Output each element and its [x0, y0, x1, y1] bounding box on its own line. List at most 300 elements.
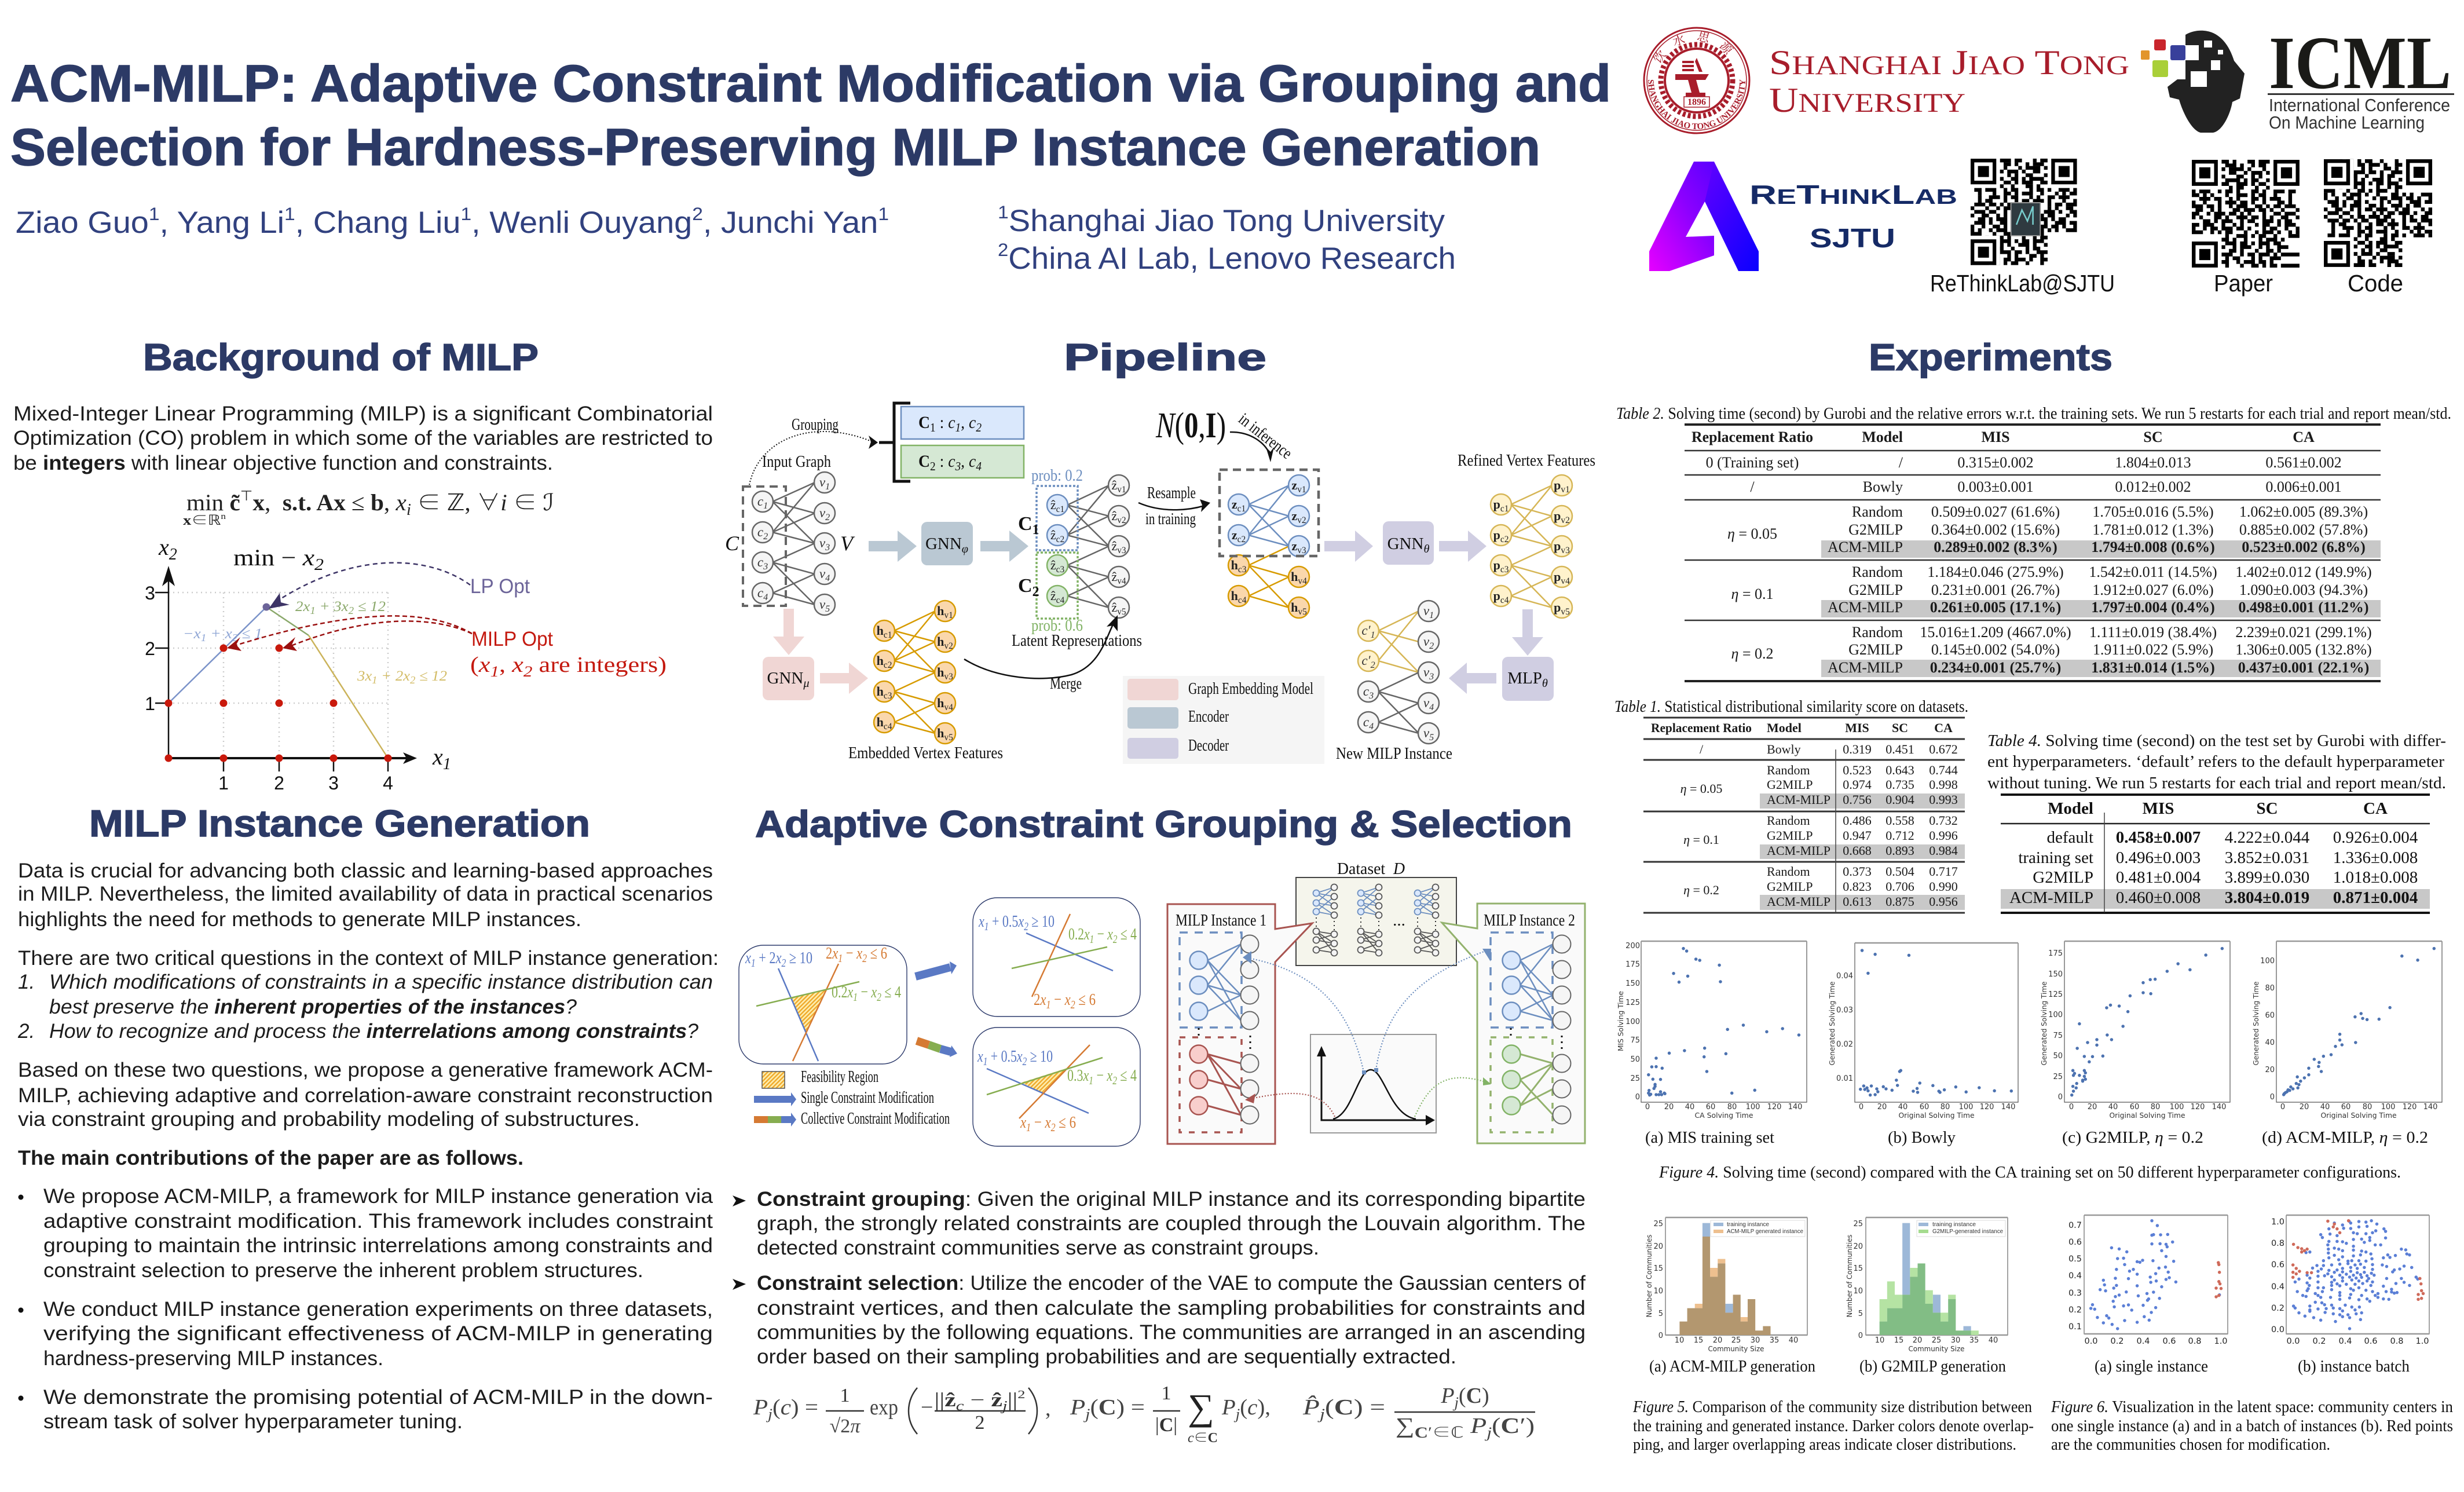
text block: main contributions: stream task of solver hyperparameter tuning.	[43, 1410, 463, 1433]
table 4: 3.852±0.031	[2225, 849, 2309, 867]
text block: main contributions: We propose ACM-MILP, a framework for MILP instance generation via	[43, 1185, 713, 1208]
text block: main contributions: hardness-preserving MILP instances.	[43, 1347, 383, 1370]
QR code: code	[2324, 159, 2432, 267]
equation: MILP formulation: min c̃⊤x, s.t. Ax ≤ b, xi ∈ ℤ, ∀i ∈ ℐ	[186, 489, 554, 519]
table 1 caption: Table 1. Statistical distributional similarity score on datasets.	[1614, 698, 1968, 716]
table 1: 0.893	[1885, 843, 1914, 858]
heading: MILP Instance Generation: MILP Instance Generation	[89, 802, 590, 844]
histogram legend: training instance	[1932, 1222, 1976, 1228]
table 1: 0.823	[1843, 879, 1872, 894]
embedded vertex features: hv4	[937, 696, 953, 712]
icon: SJTU seal: 饮水思源	[1653, 30, 1734, 63]
chart: ACM-MILP scatter: 140	[2423, 1103, 2437, 1111]
chart: MIS training set scatter: 100	[1625, 1018, 1640, 1026]
table 2: Random	[1852, 624, 1903, 641]
table 1: 0.668	[1843, 843, 1872, 858]
chart: latent space single instance: 0.2	[2068, 1306, 2082, 1315]
text block: main contributions: adaptive constraint modification. This framework includes constraint	[43, 1210, 713, 1233]
table 1: Model	[1767, 721, 1802, 735]
chart: MIS training set scatter: 75	[1630, 1036, 1640, 1045]
original feasibility box: 0.2x1 − x2 ≤ 4	[832, 983, 901, 1004]
chart: ACM-MILP scatter: 80	[2265, 984, 2275, 993]
table 1: 0.990	[1929, 879, 1958, 894]
refined vertex features: pc2	[1493, 528, 1509, 544]
icon: SJTU seal	[1643, 27, 1750, 134]
refined vertex features: pv1	[1554, 478, 1570, 495]
table 1: 0.373	[1843, 864, 1872, 879]
new MILP instance: v5	[1423, 726, 1434, 743]
QR labels: Code	[2348, 270, 2403, 297]
ReThinkLab wordmark	[1749, 180, 1957, 253]
chart: ACM-MILP scatter: 20	[2265, 1066, 2275, 1074]
chart: MILP feasible region: MILP Opt	[471, 628, 553, 650]
chart: Bowly scatter: Original Solving Time	[1898, 1111, 1975, 1120]
table 2: Replacement Ratio	[1692, 429, 1813, 445]
embedded vertex features: hv5	[937, 726, 953, 743]
merge arrow: Merge	[1050, 674, 1082, 693]
chart: latent space single instance: 0.3	[2068, 1289, 2082, 1298]
embedded vertex features: hc4	[877, 715, 892, 732]
table 2: η = 0.1	[1731, 586, 1774, 602]
table 2: 0.523±0.002 (6.8%)	[2242, 539, 2366, 555]
chart: MIS training set scatter: 140	[1788, 1103, 1802, 1111]
table 1: ACM-MILP	[1767, 843, 1830, 858]
table 1: 0.523	[1843, 763, 1872, 777]
latent representations: ẑv2	[1111, 509, 1126, 525]
table 2: 0.561±0.002	[2265, 454, 2342, 471]
chart: latent space single instance: 0.7	[2068, 1221, 2082, 1230]
table 2: ACM-MILP	[1828, 539, 1903, 555]
SJTU wordmark: UNIVERSITY	[1769, 81, 1965, 119]
refined vertex features	[1458, 451, 1595, 618]
original feasibility box: 2x1 − x2 ≤ 6	[826, 944, 887, 965]
table 2: 0.364±0.002 (15.6%)	[1931, 521, 2060, 538]
latent representations: ẑv5	[1111, 600, 1126, 617]
chart: Bowly scatter: (b) Bowly	[1888, 1128, 1956, 1147]
histogram legend: ACM-MILP generated instance	[1727, 1228, 1803, 1235]
heading: Pipeline: Pipeline	[1064, 336, 1266, 378]
latent representations: ẑc2	[1050, 528, 1064, 544]
chart: ACM-MILP community histogram: 25	[1653, 1220, 1663, 1228]
text block: two critical questions: How to recognize and process the interrelations among constraints ?	[49, 1020, 699, 1043]
chart: MILP feasible region: 2x1 + 3x2 ≤ 12	[295, 599, 386, 616]
text block: main contributions: verifying the significant effectiveness of ACM-MILP in generating	[43, 1322, 713, 1345]
chart: MILP feasible region: 3	[145, 583, 155, 604]
affiliations: 1Shanghai Jiao Tong University	[998, 202, 1445, 238]
chart: latent space single instance: 0.4	[2136, 1337, 2150, 1346]
affiliations	[998, 202, 1456, 276]
refined vertex features: pv2	[1554, 509, 1570, 525]
table 2: /	[1750, 478, 1755, 495]
table 1: 0.451	[1885, 742, 1914, 756]
table 2: ACM-MILP	[1828, 659, 1903, 676]
resample arrow: in training	[1145, 510, 1196, 528]
input graph: v4	[819, 566, 830, 583]
chart: Bowly scatter: Generated Solving Time	[1828, 981, 1836, 1066]
text block: MILP background: Mixed-Integer Linear Programming (MILP) is a significant Combinatorial	[13, 403, 713, 425]
chart: G2MILP community histogram: 15	[1894, 1336, 1903, 1345]
resample arrow: Resample	[1147, 484, 1196, 502]
text block: data motivation	[18, 860, 713, 931]
equations: sampling probabilities	[753, 1383, 1535, 1446]
table 1: CA	[1934, 721, 1953, 735]
input graph	[725, 452, 855, 615]
table 1: 0.732	[1929, 813, 1958, 828]
table 2: 0.509±0.027 (61.6%)	[1931, 503, 2060, 520]
text block: proposal	[18, 1059, 713, 1131]
table 1: ACM-MILP	[1767, 792, 1830, 807]
table 1: Random	[1767, 763, 1810, 777]
new MILP instance: v4	[1423, 696, 1434, 712]
new MILP instance: v3	[1423, 665, 1434, 682]
chart: ACM-MILP scatter: Generated Solving Time	[2251, 981, 2260, 1066]
table 2: η = 0.05	[1727, 525, 1777, 542]
chart: G2MILP community histogram: 25	[1932, 1336, 1941, 1345]
table 1: 0.672	[1929, 742, 1958, 756]
chart: ACM-MILP community histogram: Community Size	[1708, 1344, 1764, 1353]
input graph: V	[840, 532, 855, 555]
table 1: 0.319	[1843, 742, 1872, 756]
chart: latent space single instance: 0.6	[2068, 1238, 2082, 1247]
chart: MILP feasible region: min − x2	[233, 544, 324, 574]
chart: latent space single instance: 0.0	[2084, 1337, 2098, 1346]
chart: G2MILP scatter: Generated Solving Time	[2040, 981, 2048, 1066]
table 2: MIS	[1981, 429, 2010, 445]
equations: sampling probabilities: ,	[1045, 1396, 1050, 1421]
chart: Bowly scatter: 20	[1877, 1103, 1887, 1111]
chart: ACM-MILP community histogram: 20	[1713, 1336, 1722, 1345]
equations: sampling probabilities: 1	[840, 1385, 850, 1406]
instance 2 panel	[1442, 904, 1585, 1143]
icon: SJTU seal: 1896	[1687, 97, 1706, 107]
chart: G2MILP community histogram: 40	[1989, 1336, 1998, 1345]
chart: ACM-MILP scatter: 100	[2381, 1103, 2395, 1111]
bullet: constraint selection	[733, 1272, 1586, 1368]
table 1: 0.998	[1929, 777, 1958, 792]
modification legend: Collective Constraint Modification	[801, 1109, 950, 1128]
figure 6 caption: Figure 6. Visualization in the latent space: community centers in	[2051, 1398, 2453, 1416]
chart: ACM-MILP community histogram	[1645, 1217, 1815, 1376]
chart: latent space single instance: 1.0	[2214, 1337, 2228, 1346]
chart: MIS training set scatter: (a) MIS training set	[1645, 1128, 1774, 1147]
latent representations: ẑv1	[1111, 478, 1126, 495]
table 1: SC	[1892, 721, 1908, 735]
chart: G2MILP community histogram: Number of Communities	[1845, 1235, 1854, 1317]
table 4 caption: Table 4. Solving time (second) on the test set by Gurobi with differ-	[1987, 732, 2446, 750]
pipeline legend	[1123, 676, 1324, 764]
latent representations: ẑv4	[1111, 569, 1126, 586]
input graph: c3	[757, 555, 768, 572]
modified box: collective: 0.3x1 − x2 ≤ 4	[1067, 1066, 1137, 1087]
input graph: Input Graph	[762, 452, 831, 471]
chart: G2MILP scatter: 40	[2108, 1103, 2118, 1111]
table 2: 0.003±0.001	[1957, 478, 2034, 495]
chart: latent space instance batch: 0.8	[2271, 1239, 2284, 1248]
new MILP instance: c3	[1363, 684, 1374, 701]
input graph: v2	[819, 506, 830, 522]
bullet: constraint selection: order based on their sampling probabilities and are sequentially extracted.	[757, 1345, 1456, 1368]
table 2: 1.184±0.046 (275.9%)	[1927, 564, 2064, 580]
sampling probability arrows	[1243, 949, 1491, 1117]
modified box: collective: x1 − x2 ≤ 6	[1020, 1113, 1076, 1134]
resampled graph: hc3	[1231, 558, 1247, 575]
embedded vertex features: hv1	[937, 604, 953, 620]
chart: G2MILP community histogram: (b) G2MILP generation	[1859, 1357, 2006, 1376]
chart: MIS training set scatter	[1616, 941, 1807, 1147]
chart: G2MILP scatter: 75	[2053, 1032, 2063, 1040]
resampled graph	[1220, 470, 1319, 618]
chart: latent space instance batch	[2271, 1215, 2429, 1376]
chart: ACM-MILP community histogram: 25	[1731, 1336, 1741, 1345]
chart: ACM-MILP scatter: 0	[2270, 1093, 2275, 1102]
gaussian prior: N(0,I)	[1155, 406, 1226, 445]
embedded vertex features: hc3	[877, 684, 892, 701]
table 1: 0.486	[1843, 813, 1872, 828]
table 2: G2MILP	[1848, 582, 1903, 598]
refined vertex features: pc1	[1493, 497, 1509, 514]
figure 6 caption	[2051, 1398, 2453, 1454]
table 4: SC	[2256, 799, 2278, 818]
text block: two critical questions: 1.	[18, 971, 35, 993]
chart: MILP feasible region: −x1 + x2 ≤ 1	[183, 626, 262, 643]
chart: latent space instance batch: 0.0	[2271, 1325, 2284, 1334]
chart: Bowly scatter: 140	[2001, 1103, 2015, 1111]
text block: MILP background: Optimization (CO) problem in which some of the variables are restricted to	[13, 427, 713, 449]
graph embedding model: GNNμ	[767, 669, 810, 690]
table 1: 0.706	[1885, 879, 1914, 894]
chart: ACM-MILP community histogram: 10	[1675, 1336, 1684, 1345]
chart: latent space instance batch: 0.8	[2390, 1337, 2404, 1346]
bullet: constraint selection: communities by the following equations. The communities are arranged in an ascending	[757, 1321, 1586, 1344]
grouping result boxes	[749, 403, 1024, 485]
chart: Bowly scatter: 0.04	[1836, 972, 1853, 981]
figure 5 caption: Figure 5. Comparison of the community size distribution between	[1632, 1398, 2032, 1416]
bullet: constraint grouping: Constraint grouping : Given the original MILP instance and its corresponding bipartite	[757, 1188, 1586, 1211]
table 4: 1.336±0.008	[2333, 849, 2418, 867]
figure 4 caption: Figure 4. Solving time (second) compared with the CA training set on 50 different hyperparameter configurations.	[1658, 1164, 2401, 1182]
chart: G2MILP scatter: 140	[2212, 1103, 2226, 1111]
chart: G2MILP scatter: 50	[2053, 1052, 2063, 1061]
chart: latent space instance batch: 1.0	[2271, 1217, 2284, 1227]
input graph: v1	[819, 475, 830, 492]
figure 5 caption: the training and generated instance. Darker colors denote overlap-	[1633, 1417, 2034, 1435]
ICML wordmark: International Conference	[2269, 95, 2450, 115]
resampled graph: zc1	[1232, 497, 1246, 514]
text block: two critical questions: 2.	[17, 1020, 35, 1043]
table 4: ACM-MILP	[2009, 888, 2093, 907]
table 2: 1.781±0.012 (1.3%)	[2092, 521, 2214, 538]
new MILP instance: v1	[1423, 604, 1434, 620]
QR labels: ReThinkLab@SJTU	[1930, 270, 2115, 297]
table 1: 0.984	[1929, 843, 1958, 858]
title: Selection for Hardness-Preserving MILP Instance Generation	[10, 119, 1540, 177]
table 4: MIS	[2143, 799, 2174, 818]
QR labels: Paper	[2214, 270, 2273, 297]
input graph: C	[725, 532, 739, 555]
bullet: constraint grouping	[733, 1188, 1586, 1259]
equations: sampling probabilities: Pj(c),	[1221, 1395, 1271, 1422]
chart: MILP feasible region: 3	[328, 773, 339, 793]
table 4: 0.458±0.007	[2116, 828, 2201, 847]
table 2: /	[1899, 454, 1903, 471]
table 4: 0.496±0.003	[2116, 849, 2201, 867]
table 1: 0.875	[1885, 894, 1914, 909]
table 1: /	[1700, 742, 1704, 756]
table 4: 1.018±0.008	[2333, 868, 2418, 887]
table 2: η = 0.2	[1731, 645, 1774, 662]
table 1: 0.744	[1929, 763, 1958, 777]
table 4: G2MILP	[2033, 868, 2093, 887]
input graph: c2	[757, 525, 768, 542]
chart: MIS training set scatter: 80	[1727, 1103, 1737, 1111]
table 2: 0.289±0.002 (8.3%)	[1934, 539, 2057, 555]
chart: Bowly scatter: 0	[1859, 1103, 1863, 1111]
resampled graph: hc4	[1231, 588, 1247, 605]
chart: MILP feasible region: (x1, x2 are integers)	[470, 653, 667, 680]
chart: MIS training set scatter: 125	[1625, 999, 1640, 1007]
chart: MILP feasible region: 1	[145, 693, 155, 714]
bullet: constraint selection: constraint vertices, and then calculate the sampling probabilities for constraints and	[757, 1297, 1586, 1319]
input graph: c4	[757, 586, 768, 602]
table 1: G2MILP	[1767, 777, 1813, 792]
MLP decoder	[1449, 609, 1554, 701]
equations: sampling probabilities: ∑C′∈ℂ Pj(C′)	[1396, 1414, 1535, 1441]
resample arrow	[1138, 484, 1210, 528]
table 2: 0.145±0.002 (54.0%)	[1931, 641, 2060, 658]
table 1: 0.996	[1929, 828, 1958, 843]
chart: latent space single instance: 0.1	[2068, 1322, 2082, 1332]
table 1: 0.993	[1929, 792, 1958, 807]
dataset box	[1296, 860, 1456, 966]
icon: SJTU seal: SHANGHAI JIAO TONG UNIVERSITY	[1648, 79, 1745, 130]
equations: sampling probabilities: |C|	[1155, 1414, 1177, 1436]
refined vertex features: pv5	[1554, 600, 1570, 617]
chart: MIS training set scatter: 20	[1664, 1103, 1674, 1111]
table 4 caption: without tuning. We run 5 restarts for each trial and report mean/std.	[1987, 774, 2446, 792]
chart: MIS training set scatter: 150	[1625, 979, 1640, 988]
chart: ACM-MILP community histogram: 35	[1770, 1336, 1779, 1345]
text block: data motivation: in MILP. Nevertheless, the limited availability of data in practical scenarios	[18, 883, 713, 905]
text block: data motivation: highlights the need for methods to generate MILP instances.	[18, 908, 581, 931]
refined vertex features: pv4	[1554, 569, 1570, 586]
chart: MILP feasible region: LP Opt	[470, 575, 530, 598]
table 1: G2MILP	[1767, 879, 1813, 894]
table 2: CA	[2293, 429, 2315, 445]
table 1: G2MILP	[1767, 828, 1813, 843]
pipeline legend: Decoder	[1188, 736, 1229, 755]
MLP decoder: MLPθ	[1507, 669, 1548, 690]
equation: MILP formulation: x∈ℝ n	[183, 512, 226, 528]
chart: latent space single instance: 0.5	[2068, 1255, 2082, 1264]
gaussian prior	[1155, 406, 1295, 463]
decoder arrows and block	[1324, 521, 1487, 565]
bullet: constraint selection: Constraint selection : Utilize the encoder of the VAE to compute the Gaussian centers of	[757, 1272, 1586, 1294]
chart: ACM-MILP scatter: 0	[2280, 1103, 2285, 1111]
chart: latent space single instance: 0.6	[2162, 1337, 2176, 1346]
resampled graph: hv5	[1291, 600, 1307, 617]
equations: sampling probabilities: ||ẑc − ẑj||2	[935, 1388, 1025, 1414]
chart: Bowly scatter: 80	[1941, 1103, 1950, 1111]
latent representations: ẑc3	[1050, 558, 1064, 575]
table 2: 1.402±0.012 (149.9%)	[2235, 564, 2372, 580]
table 2: SC	[2143, 429, 2163, 445]
embedded vertex features: Embedded Vertex Features	[848, 744, 1003, 762]
chart: G2MILP community histogram: 25	[1853, 1220, 1863, 1228]
table 1: 0.735	[1885, 777, 1914, 792]
text block: two critical questions: best preserve the inherent properties of the instances ?	[49, 996, 577, 1018]
table 4 caption: ent hyperparameters. ‘default’ refers to the default hyperparameter	[1987, 753, 2445, 771]
chart: ACM-MILP scatter: 100	[2260, 957, 2275, 966]
chart: MIS training set scatter: 0	[1645, 1103, 1650, 1111]
embedded vertex features: hv3	[937, 665, 953, 682]
equations: sampling probabilities: √2π	[830, 1416, 861, 1437]
table 2: 0.006±0.001	[2265, 478, 2342, 495]
chart: G2MILP scatter: 150	[2048, 970, 2063, 979]
figure 5 caption: ping, and larger overlapping areas indicate closer distributions.	[1633, 1436, 2016, 1454]
modified box: single: 0.2x1 − x2 ≤ 4	[1068, 925, 1137, 946]
SJTU wordmark	[1769, 43, 2129, 119]
latent representations: prob: 0.6	[1031, 616, 1083, 635]
chart: MILP feasible region: 2	[145, 638, 155, 659]
modified box: single: x1 + 0.5x2 ≥ 10	[978, 912, 1055, 933]
table 1: 0.756	[1843, 792, 1872, 807]
chart: MIS training set scatter: CA Solving Time	[1694, 1111, 1753, 1120]
table 2: G2MILP	[1848, 641, 1903, 658]
table 2: 1.912±0.027 (6.0%)	[2092, 582, 2214, 598]
chart: ACM-MILP community histogram: 15	[1694, 1336, 1703, 1345]
chart: latent space instance batch: 0.4	[2338, 1337, 2352, 1346]
chart: MIS training set scatter: 0	[1635, 1093, 1640, 1102]
pipeline legend: Graph Embedding Model	[1188, 679, 1313, 698]
chart: MILP feasible region: 2	[274, 773, 284, 793]
latent representations: prob: 0.2	[1031, 466, 1083, 485]
table 4: 4.222±0.044	[2225, 828, 2310, 847]
table 4 caption	[1987, 732, 2446, 792]
table 1: MIS	[1845, 721, 1869, 735]
table 1: Random	[1767, 864, 1810, 879]
ICML wordmark: On Machine Learning	[2269, 112, 2425, 133]
chart: ACM-MILP scatter: 120	[2403, 1103, 2417, 1111]
chart: ACM-MILP community histogram: 0	[1658, 1332, 1663, 1340]
chart: latent space instance batch: 0.2	[2271, 1304, 2284, 1313]
chart: G2MILP scatter	[2040, 941, 2230, 1147]
text block: two critical questions: There are two critical questions in the context of MILP instance generation:	[18, 947, 719, 970]
chart: latent space instance batch: (b) instance batch	[2298, 1357, 2410, 1376]
embedded vertex features: hv2	[937, 634, 953, 651]
text block: main contributions: The main contributions of the paper are as follows.	[18, 1147, 523, 1169]
table 4: 0.481±0.004	[2116, 868, 2201, 887]
chart: G2MILP community histogram: 10	[1875, 1336, 1884, 1345]
chart: latent space single instance: 0.2	[2110, 1337, 2124, 1346]
latent representations: ẑc1	[1050, 498, 1064, 514]
table 1: η = 0.05	[1681, 781, 1722, 796]
chart: G2MILP community histogram: 35	[1969, 1336, 1979, 1345]
table 2: 0.437±0.001 (22.1%)	[2238, 659, 2369, 676]
chart: Bowly scatter: 40	[1898, 1103, 1908, 1111]
chart: ACM-MILP scatter: 80	[2363, 1103, 2372, 1111]
refined vertex features: Refined Vertex Features	[1458, 451, 1595, 470]
table 4: Model	[2048, 799, 2093, 818]
figure 6 caption: are the communities chosen for modification.	[2051, 1436, 2330, 1454]
pipeline legend: Encoder	[1188, 707, 1229, 726]
table 1: 0.643	[1885, 763, 1914, 777]
table 1: 0.613	[1843, 894, 1872, 909]
table 2: 0.012±0.002	[2115, 478, 2191, 495]
table 4: default	[2046, 828, 2093, 847]
table 1: 0.504	[1885, 864, 1914, 879]
text block: main contributions: We demonstrate the promising potential of ACM-MILP in the down-	[43, 1386, 713, 1409]
diagram: pipeline	[725, 403, 1595, 764]
